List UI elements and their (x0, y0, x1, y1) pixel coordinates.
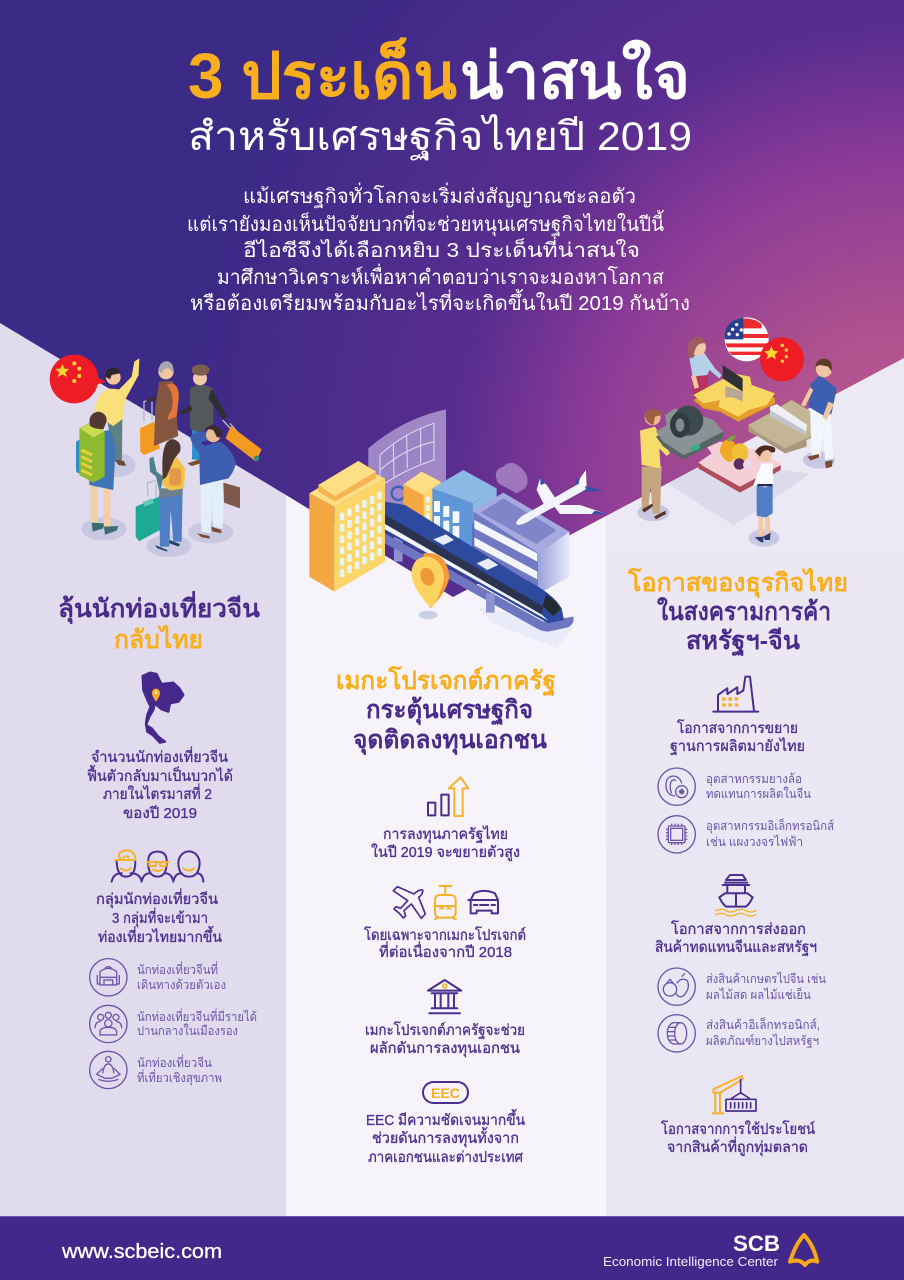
text: recovery of Chinese tourists: ของปี 2019 (123, 805, 197, 822)
cloud icon (496, 463, 528, 493)
person: waving man in yellow (94, 358, 139, 466)
panel: right column (606, 358, 904, 1216)
title: น่าสนใจ (460, 39, 690, 112)
text: mid-income travellers: ปานกลางในเมืองรอง (137, 1024, 238, 1038)
train on viaduct (385, 502, 574, 632)
text: export substitution: โอกาสจากการส่งออก (671, 920, 806, 938)
small yellow building (403, 472, 441, 523)
text: continued projects (364, 926, 526, 961)
icon: backpack circle (90, 959, 127, 996)
text: independent travellers: นักท่องเที่ยวจีนที่ (137, 961, 218, 977)
intro paragraph: แต่เรายังมองเห็นปัจจัยบวกที่จะช่วยหนุนเศรษฐกิจไทยในปีนี้ (187, 210, 664, 237)
heading: trade war opportunities: ในสงครามการค้า (657, 596, 831, 626)
text: recovery of Chinese tourists: ภายในไตรมาสที่ 2 (103, 783, 212, 803)
person: man with tyres (640, 409, 670, 519)
icon: chip circle (658, 816, 695, 853)
text: production base (670, 719, 805, 755)
text: health travellers: ที่เที่ยวเชิงสุขภาพ (137, 1069, 222, 1086)
puzzle: pink piece with fruits (698, 435, 781, 493)
text: public investment: การลงทุนภาครัฐไทย (383, 825, 508, 844)
yellow tower (309, 461, 385, 592)
person: man in blue sweater (190, 426, 240, 539)
intro paragraph: แม้เศรษฐกิจทั่วโลกจะเริ่มส่งสัญญาณชะลอตัว (243, 182, 636, 208)
icon: meditation circle (90, 1051, 127, 1089)
text: continued projects: ที่ต่อเนื่องจากปี 2018 (379, 941, 512, 961)
intro paragraph: หรือต้องเตรียมพร้อมกับอะไรที่จะเกิดขึ้นในปี 2019 กันบ้าง (190, 289, 690, 315)
lavender building (473, 493, 569, 594)
blue building (432, 470, 497, 550)
person: woman with teal suitcase (136, 439, 185, 552)
text: electronics and rubber exports (706, 1017, 820, 1048)
text: electronics and rubber exports: ส่งสินค้าอิเล็กทรอนิกส์, (706, 1017, 820, 1032)
footer logo: Economic Intelligence Center (603, 1254, 779, 1269)
icon: tyre circle (658, 1015, 695, 1052)
person: man in blue shirt (801, 359, 837, 468)
heading: trade war opportunities: สหรัฐฯ-จีน (686, 627, 800, 657)
text: continued projects: โดยเฉพาะจากเมกะโปรเจกต์ (364, 926, 526, 944)
text: agricultural exports (706, 972, 826, 1002)
text: three tourist groups: ท่องเที่ยวไทยมากขึ้น (98, 926, 222, 946)
text: three tourist groups: กลุ่มนักท่องเที่ยวจีน (96, 888, 218, 909)
illustration: megaproject city, train and plane (309, 409, 607, 648)
heading: megaprojects: จุดติดลงทุนเอกชน (353, 726, 547, 756)
text: agricultural exports: ส่งสินค้าเกษตรไปจีน เช่น (706, 972, 826, 986)
illustration: trade war puzzle (637, 317, 837, 547)
heading: Chinese tourists: ลุ้นนักท่องเที่ยวจีน (58, 591, 260, 625)
icon: location pin (412, 553, 449, 619)
text: mid-income travellers: นักท่องเที่ยวจีนที่มีรายได้ (137, 1008, 257, 1024)
text: electronics industry: เช่น แผงวงจรไฟฟ้า (706, 835, 803, 849)
icon: crane and container (713, 1076, 756, 1113)
text: EEC: ช่วยดันการลงทุนทั้งจาก (372, 1127, 519, 1148)
text: three tourist groups (96, 888, 222, 946)
heading: trade war opportunities: โอกาสของธุรกิจไทย (627, 567, 848, 599)
heading: megaprojects (336, 665, 556, 756)
icon: airplane (516, 470, 607, 525)
text: tyre industry: อุตสาหกรรมยางล้อ (706, 772, 802, 787)
text: dumped goods (661, 1120, 815, 1157)
puzzle: grey piece with tyres (656, 406, 723, 460)
icon: plane, train and car (393, 886, 498, 919)
icon: government building (428, 980, 461, 1013)
panel: centre column (286, 495, 606, 1216)
text: export substitution: สินค้าทดแทนจีนและสหรัฐฯ (655, 939, 817, 956)
heading: Chinese tourists: กลับไทย (114, 624, 203, 654)
person: man in grey vest (180, 364, 227, 466)
icon: USA flag (725, 317, 769, 361)
text: public investment: ในปี 2019 จะขยายตัวสูง (371, 843, 520, 861)
text: public investment (371, 825, 520, 861)
puzzle: yellow piece with monitor (693, 365, 775, 422)
text: dumped goods: โอกาสจากการใช้ประโยชน์ (661, 1120, 815, 1138)
text: tyre industry (706, 772, 811, 801)
heading: megaprojects: กระตุ้นเศรษฐกิจ (366, 696, 533, 726)
pillar (394, 537, 403, 562)
text: electronics industry: อุตสาหกรรมอิเล็กทรอนิกส์ (706, 818, 834, 834)
icon: group circle (90, 1005, 127, 1043)
text: electronics industry (706, 818, 834, 849)
text: EEC: EEC มีความชัดเจนมากขึ้น (366, 1109, 525, 1129)
puzzle shadow (668, 462, 810, 525)
text: crowd in private investment (365, 1021, 525, 1058)
person: woman at monitor (688, 337, 722, 407)
text: recovery of Chinese tourists: จำนวนนักท่องเที่ยวจีน (91, 746, 228, 766)
text: recovery of Chinese tourists (87, 746, 233, 822)
icon: rising bars with arrow (428, 777, 468, 816)
footer logo (603, 1231, 817, 1269)
title: สำหรับเศรษฐกิจไทยปี 2019 (188, 114, 692, 161)
text: EEC: ภาคเอกชนและต่างประเทศ (368, 1149, 523, 1166)
text: electronics and rubber exports: ผลิตภัณฑ์ยางไปสหรัฐฯ (706, 1034, 819, 1048)
text: three tourist groups: 3 กลุ่มที่จะเข้ามา (112, 907, 208, 928)
illustration: Chinese tourists (50, 355, 262, 557)
intro paragraph (187, 182, 690, 315)
icon: tilted orange suitcase (223, 420, 262, 462)
footer bar (0, 1216, 904, 1280)
icon: EEC pill (423, 1082, 468, 1103)
text: independent travellers: เดินทางด้วยตัวเอง (137, 978, 226, 992)
heading: megaprojects: เมกะโปรเจกต์ภาครัฐ (336, 665, 556, 697)
footer logo: SCB (733, 1231, 780, 1256)
text: mid-income travellers (137, 1008, 257, 1038)
person: woman in blue skirt (753, 445, 775, 543)
text: dumped goods: จากสินค้าที่ถูกทุ่มตลาด (667, 1136, 808, 1157)
ring decoration (392, 487, 405, 500)
text: production base: ฐานการผลิตมายังไทย (670, 737, 805, 755)
title: 3 ประเด็น (188, 38, 457, 112)
text: health travellers (137, 1054, 222, 1086)
text: independent travellers (137, 961, 226, 992)
icon: tyre circle (658, 768, 695, 805)
icon: EEC pill: EEC (431, 1085, 460, 1101)
icon: fruit circle (658, 968, 695, 1005)
intro paragraph: อีไอซีจึงได้เลือกหยิบ 3 ประเด็นที่น่าสนใจ (243, 236, 640, 262)
puzzle: beige piece with air conditioner (748, 400, 831, 453)
footer website: www.scbeic.com (61, 1241, 222, 1263)
icon: cargo ship (716, 875, 756, 916)
icon: China flag bubble (50, 355, 106, 403)
window panel behind buildings (368, 409, 446, 523)
text: crowd in private investment: เมกะโปรเจกต์ภาครัฐจะช่วย (365, 1021, 525, 1039)
heading: trade war opportunities (627, 567, 848, 657)
icon: three tourist faces (112, 850, 203, 882)
text: export substitution (655, 920, 817, 956)
text: crowd in private investment: ผลักดันการลงทุนเอกชน (370, 1040, 520, 1058)
icon: China flag (760, 337, 804, 381)
text: tyre industry: ทดแทนการผลิตในจีน (706, 787, 811, 801)
icon: Thailand map (143, 673, 183, 743)
intro paragraph: มาศึกษาวิเคราะห์เพื่อหาคำตอบว่าเราจะมองหาโอกาส (217, 263, 664, 289)
icon: factory (713, 677, 758, 712)
text: production base: โอกาสจากการขยาย (677, 719, 798, 737)
text: health travellers: นักท่องเที่ยวจีน (137, 1054, 212, 1070)
heading: Chinese tourists (58, 591, 260, 654)
text: recovery of Chinese tourists: ฟื้นตัวกลับมาเป็นบวกได้ (87, 765, 233, 785)
shadow of train (477, 607, 573, 648)
title (188, 38, 692, 161)
panel: left column (0, 323, 286, 1216)
text: agricultural exports: ผลไม้สด ผลไม้แช่เย็น (706, 987, 811, 1002)
person: backpacker (76, 412, 118, 535)
person: grey-haired woman with orange suitcase (140, 361, 179, 455)
text: EEC (366, 1109, 525, 1166)
